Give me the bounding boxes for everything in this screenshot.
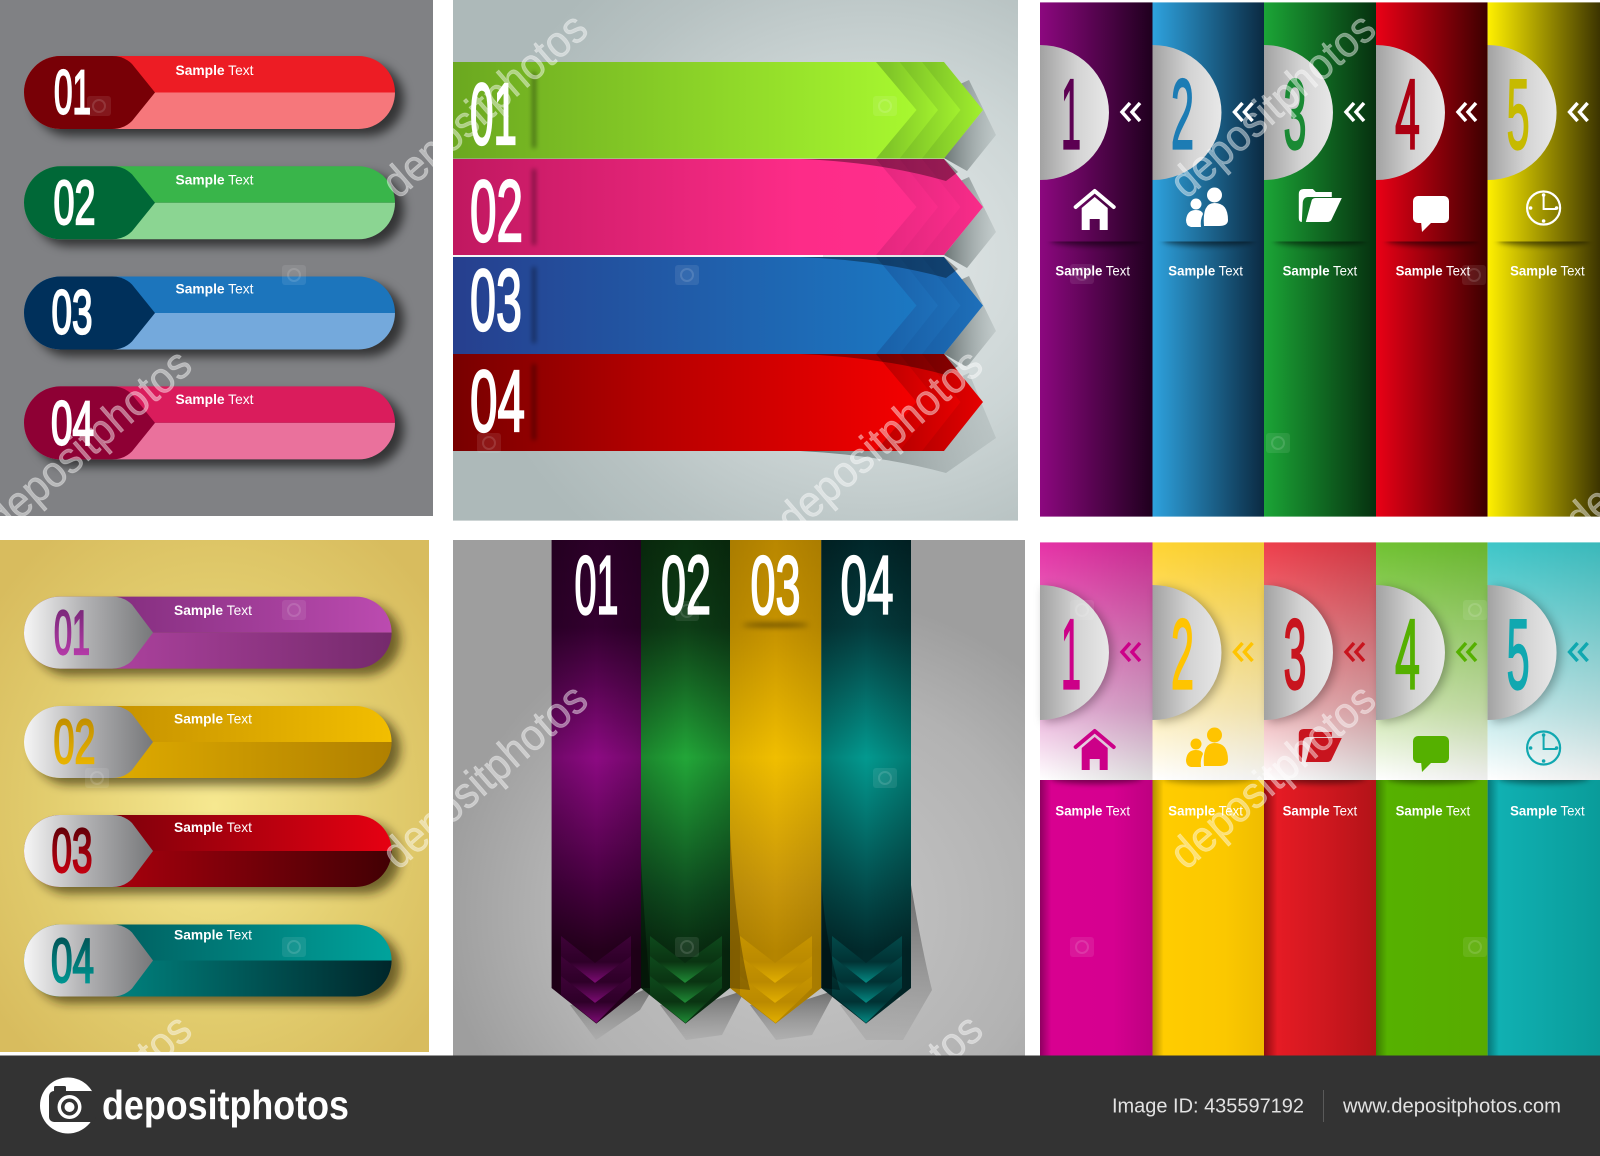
arrow 01 green: 01 [470, 66, 517, 163]
column 1 magenta [1040, 542, 1152, 1056]
column 1 purple [1040, 2, 1152, 517]
pill 03 red: Sample Text [174, 819, 252, 835]
column 5 yellow [1488, 2, 1600, 517]
column 2 blue [1152, 2, 1264, 517]
panel background [0, 540, 429, 1052]
ribbon 02 green: 02 [661, 538, 711, 632]
ribbon 04 teal: 04 [840, 538, 894, 632]
pill 02 green [24, 166, 404, 246]
footer logo [40, 1078, 349, 1134]
pill 01 purple [24, 597, 401, 676]
watermark text: depositphotos [1160, 674, 1385, 879]
pill 03 blue [24, 276, 404, 356]
arrow 03 blue: 03 [470, 252, 522, 349]
pill 04 teal: 04 [51, 927, 94, 996]
pill 03 blue: 03 [52, 278, 92, 348]
pill 02 gold: Sample Text [174, 710, 252, 726]
column 3 red: Sample Text [1283, 804, 1357, 818]
panel background [453, 0, 1018, 521]
pill 01 purple: Sample Text [174, 602, 252, 618]
arrow 01 green [453, 62, 983, 163]
column 5 yellow: Sample Text [1510, 264, 1585, 278]
pill 01 purple: 01 [54, 599, 90, 668]
image id: Image ID: 435597192 [1112, 1096, 1304, 1118]
column 2 yellow: Sample Text [1168, 804, 1243, 818]
arrow 04 red [453, 353, 983, 451]
ribbon 02 green [641, 538, 730, 1024]
column 4 red: Sample Text [1396, 264, 1470, 278]
column 1 magenta: 1 [1061, 598, 1081, 710]
pill 01 red [24, 56, 404, 136]
arrow 03 blue [453, 252, 983, 354]
pill 04 pink: Sample Text [176, 391, 254, 407]
watermark text: depositphotos [372, 674, 597, 879]
panel: grey pill banners [0, 0, 433, 516]
column 4 green [1376, 542, 1488, 1056]
panel: dark vertical columns [1040, 2, 1600, 517]
panel: bright vertical columns [1040, 542, 1600, 1056]
column 2 yellow: 2 [1171, 598, 1194, 710]
column 4 red: 4 [1395, 58, 1420, 170]
column 4 green: 4 [1395, 598, 1420, 710]
column 2 blue: Sample Text [1168, 264, 1243, 278]
pill 02 gold: 02 [54, 708, 96, 777]
column 3 red [1264, 542, 1376, 1056]
pill 03 blue: Sample Text [176, 280, 254, 296]
watermark text: depositphotos [767, 339, 992, 544]
watermark camera marks [85, 96, 1487, 957]
pill 02 green: 02 [54, 169, 96, 238]
pill 01 red: 01 [54, 58, 91, 128]
column 4 green: Sample Text [1396, 804, 1470, 818]
pill 03 red: 03 [52, 817, 92, 886]
pill 03 red [24, 815, 401, 894]
column 1 magenta: Sample Text [1055, 804, 1130, 818]
arrow 02 pink: 02 [470, 163, 523, 260]
panel: horizontal arrow banners [453, 0, 1018, 521]
ribbon 04 teal [821, 538, 911, 1024]
arrow 04 red: 04 [470, 353, 525, 450]
pill 04 pink: 04 [51, 389, 94, 458]
pill 02 green: Sample Text [176, 171, 254, 187]
arrow fold shadows [800, 159, 958, 375]
column 3 red: 3 [1284, 598, 1306, 710]
arrow drop shadows [800, 80, 996, 473]
ribbon drop shadows [570, 885, 932, 1040]
column 5 teal: Sample Text [1510, 804, 1585, 818]
panel background [0, 0, 433, 516]
website: www.depositphotos.com [1342, 1096, 1561, 1118]
column 1 purple: Sample Text [1055, 264, 1130, 278]
footer logo: depositphotos [102, 1082, 349, 1128]
footer bar [0, 1056, 1600, 1156]
column 4 red [1376, 2, 1488, 517]
panel: vertical ribbons [453, 538, 1025, 1056]
column 1 purple: 1 [1061, 58, 1081, 170]
pill 01 red: Sample Text [176, 62, 254, 78]
ribbon 01 purple [552, 538, 641, 1024]
panel: yellow pill banners [0, 540, 429, 1052]
pill 02 gold [24, 706, 401, 785]
pill 04 teal [24, 924, 401, 1004]
pill 04 pink [24, 386, 404, 466]
panel background [453, 540, 1025, 1056]
column 2 yellow [1152, 542, 1264, 1056]
column 3 green [1264, 2, 1376, 517]
column 2 blue: 2 [1171, 58, 1194, 170]
ribbon 01 purple: 01 [574, 538, 618, 632]
ribbon 03 gold [730, 538, 821, 1024]
pill 04 teal: Sample Text [174, 926, 252, 942]
column 3 green: 3 [1284, 58, 1306, 170]
column 5 teal [1488, 542, 1600, 1056]
column 5 teal: 5 [1507, 598, 1530, 710]
column 3 green: Sample Text [1283, 264, 1357, 278]
column 5 yellow: 5 [1507, 58, 1530, 170]
arrow 02 pink [453, 159, 983, 260]
ribbon 03 gold: 03 [750, 538, 800, 632]
